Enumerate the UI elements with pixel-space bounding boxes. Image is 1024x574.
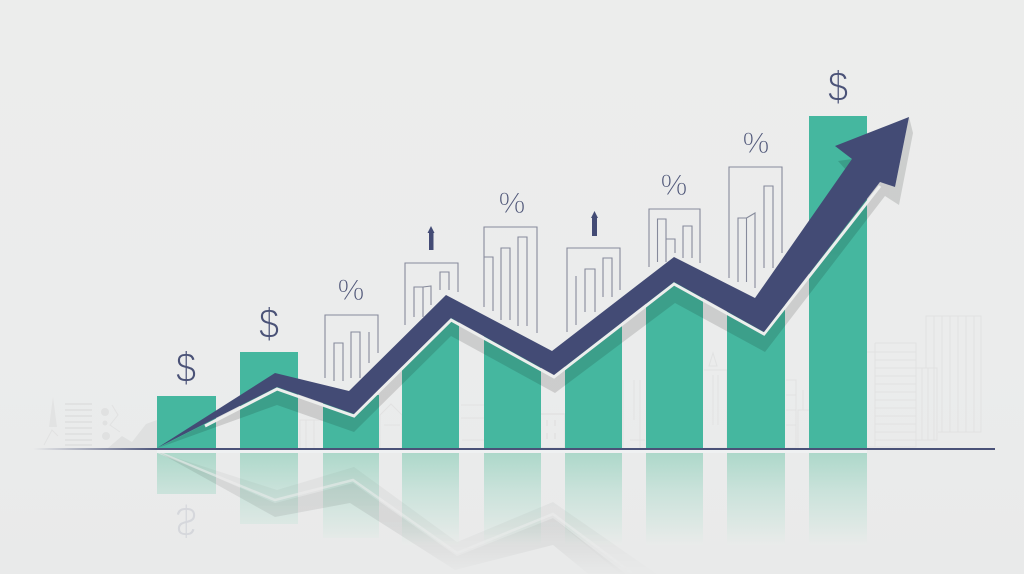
percent sign 3: % bbox=[661, 169, 687, 202]
skyline: hill behind first bar bbox=[108, 420, 157, 448]
skyline: left landmarks bbox=[44, 397, 120, 445]
faint city skyline bbox=[44, 316, 981, 448]
skyline: gap buildings bbox=[300, 353, 809, 448]
dollar sign 1: $ bbox=[176, 344, 196, 392]
arrow drop shadow bbox=[158, 117, 913, 448]
skyline: right buildings bbox=[867, 316, 981, 447]
reflection: dollar sign: $ bbox=[176, 497, 196, 545]
outline mini charts bbox=[325, 167, 782, 381]
percent sign 2: % bbox=[499, 187, 525, 220]
green bars bbox=[157, 116, 867, 448]
arrow highlight stripe bbox=[205, 186, 880, 426]
up arrow icon 1 bbox=[428, 226, 434, 250]
mini chart 2 bbox=[405, 263, 458, 325]
percent sign 1: % bbox=[338, 274, 364, 307]
mini chart 4 bbox=[567, 248, 620, 332]
reflection: arrow bbox=[158, 453, 607, 560]
mini chart 3 bbox=[484, 227, 537, 333]
baseline bbox=[33, 448, 995, 453]
mini chart 1 bbox=[325, 315, 378, 381]
rising zigzag arrow bbox=[157, 117, 909, 448]
mini chart 6 bbox=[729, 167, 782, 288]
reflection: bars bbox=[157, 453, 867, 545]
percent sign 4: % bbox=[743, 127, 769, 160]
up arrow icon 2 bbox=[591, 211, 598, 236]
dollar sign 3: $ bbox=[828, 63, 848, 111]
dollar sign 2: $ bbox=[259, 300, 279, 348]
mini chart 5 bbox=[649, 209, 700, 267]
